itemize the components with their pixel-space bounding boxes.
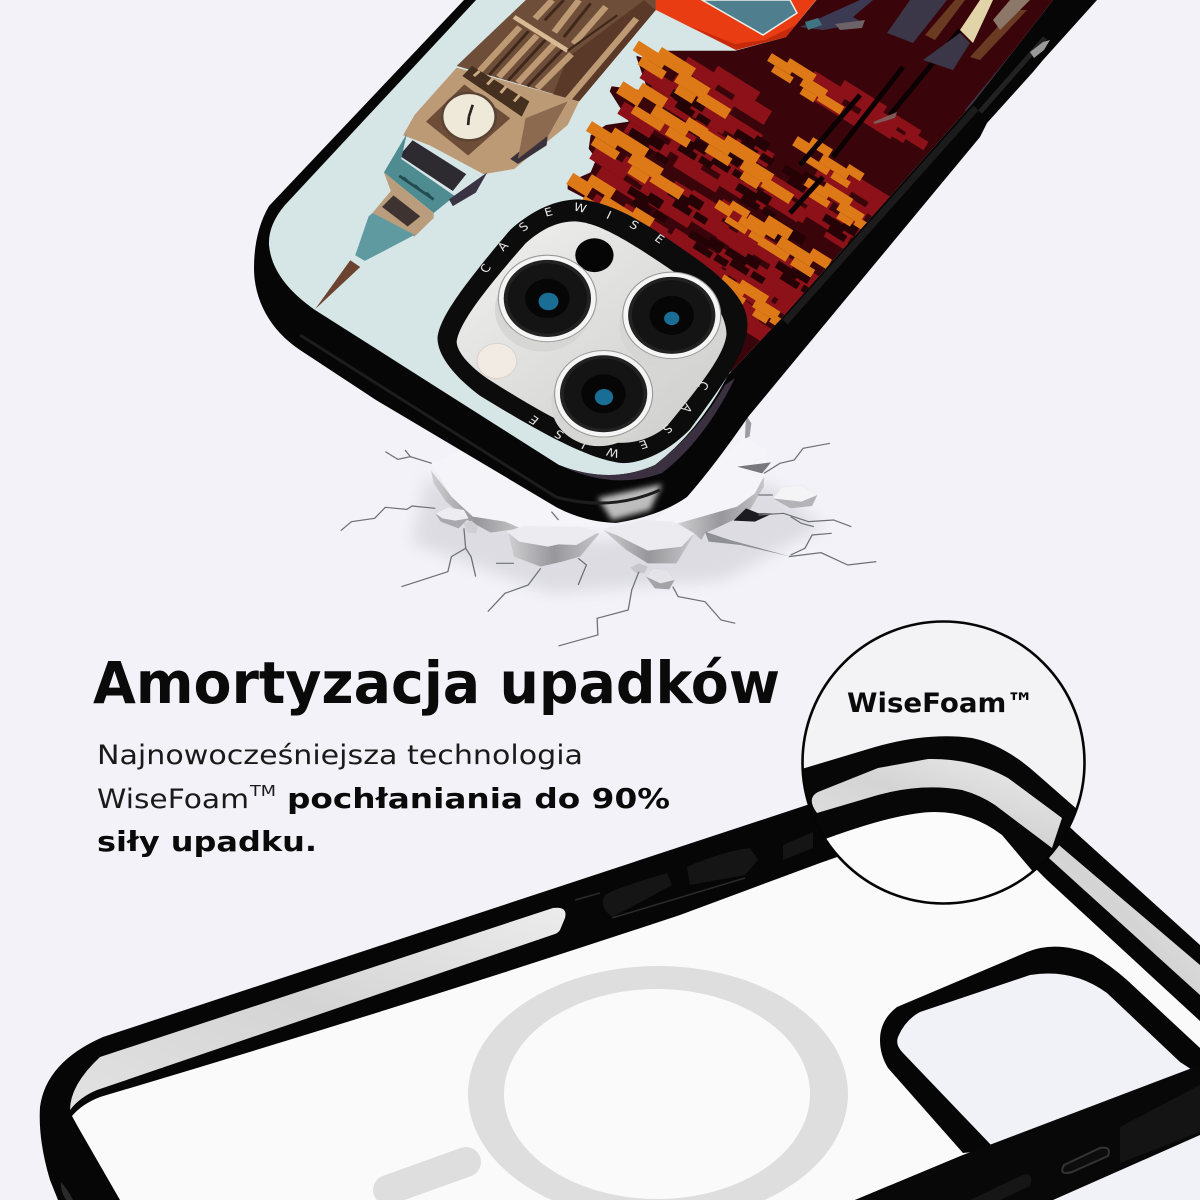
purple art strip xyxy=(553,378,735,480)
WiseFoam magnifier callout xyxy=(790,620,1095,910)
black bumper frame xyxy=(40,760,1200,1200)
spire section xyxy=(372,172,434,237)
magnified clear panel xyxy=(790,812,1095,910)
chunk: centre right xyxy=(603,530,694,563)
shaft pillars xyxy=(480,0,637,100)
right foam slot xyxy=(1040,829,1200,995)
right wedge xyxy=(705,532,791,557)
spire roof xyxy=(355,213,415,261)
case rim highlights xyxy=(300,38,1050,520)
lens 2 xyxy=(619,272,721,368)
CASEWISE lettering: CASEWISE xyxy=(480,202,665,272)
clear case, inside view xyxy=(40,760,1200,1200)
dark pixel clusters xyxy=(626,89,860,293)
case outer shell xyxy=(254,0,1097,523)
art contents xyxy=(315,0,1053,372)
description: pochłaniania do 90% xyxy=(287,782,670,815)
clear back panel xyxy=(72,800,1200,1200)
red pixel clusters xyxy=(589,56,928,341)
lens 3 xyxy=(551,351,653,446)
left foam slot xyxy=(70,908,566,1110)
tree mass xyxy=(568,0,1092,372)
louvres xyxy=(462,66,529,117)
camera cutout frame xyxy=(880,947,1200,1153)
silver camera plate xyxy=(457,221,726,443)
MagSafe alignment bar xyxy=(388,1162,466,1190)
cracks xyxy=(341,443,876,646)
lens 1 xyxy=(495,255,596,352)
microphone hole xyxy=(575,238,614,272)
flash xyxy=(477,343,517,379)
clock face xyxy=(442,93,496,140)
small chunks xyxy=(435,507,469,528)
MagSafe ring xyxy=(468,966,848,1200)
description xyxy=(97,740,670,858)
magnified bumper xyxy=(804,736,1076,870)
description: siły upadku. xyxy=(97,825,317,858)
CASEWISE lettering xyxy=(480,202,708,458)
camera island xyxy=(438,199,748,464)
right slab xyxy=(651,437,767,523)
magnified foam slot xyxy=(812,759,1062,848)
bus window xyxy=(702,0,797,35)
clock surround xyxy=(426,84,510,155)
background below case xyxy=(1053,1135,1200,1200)
magnifier background xyxy=(826,812,958,838)
description: Najnowocześniejsza technologia xyxy=(97,740,583,771)
clock chamber xyxy=(403,68,579,174)
charging port and button xyxy=(970,1148,1109,1200)
autumn tree and buildings xyxy=(568,0,1092,372)
top phone with case xyxy=(254,0,1097,523)
description: TM xyxy=(249,782,276,800)
magnifier label: WiseFoam™ xyxy=(847,688,1034,719)
side buttons xyxy=(575,832,813,918)
orange pixel clusters xyxy=(566,40,867,326)
floor shadow xyxy=(412,477,823,593)
Big Ben tower xyxy=(315,0,656,309)
art: sky xyxy=(269,0,1053,475)
spire tip xyxy=(315,260,360,309)
bottom bumper side xyxy=(855,1065,1200,1200)
island frame xyxy=(438,199,748,463)
belfry roof xyxy=(384,134,455,213)
chunk: centre left xyxy=(509,533,600,567)
description: WiseFoam xyxy=(97,784,249,815)
bumper side texture xyxy=(1120,1085,1200,1163)
tree branches xyxy=(790,30,960,213)
belfry windows xyxy=(399,140,466,191)
CASEWISE lettering: CASEWISE xyxy=(528,382,708,458)
shaft xyxy=(457,0,656,101)
magnifier outline xyxy=(802,622,1084,904)
red and orange pixels xyxy=(566,40,928,341)
heading: Amortyzacja upadków xyxy=(93,649,780,717)
cracked floor impact xyxy=(341,415,876,646)
red bus xyxy=(656,0,816,50)
side clock xyxy=(510,136,548,164)
left slab xyxy=(432,430,601,528)
distant buildings xyxy=(800,0,1030,124)
left corner hole xyxy=(61,1182,73,1200)
camera cutout opening xyxy=(897,973,1200,1146)
